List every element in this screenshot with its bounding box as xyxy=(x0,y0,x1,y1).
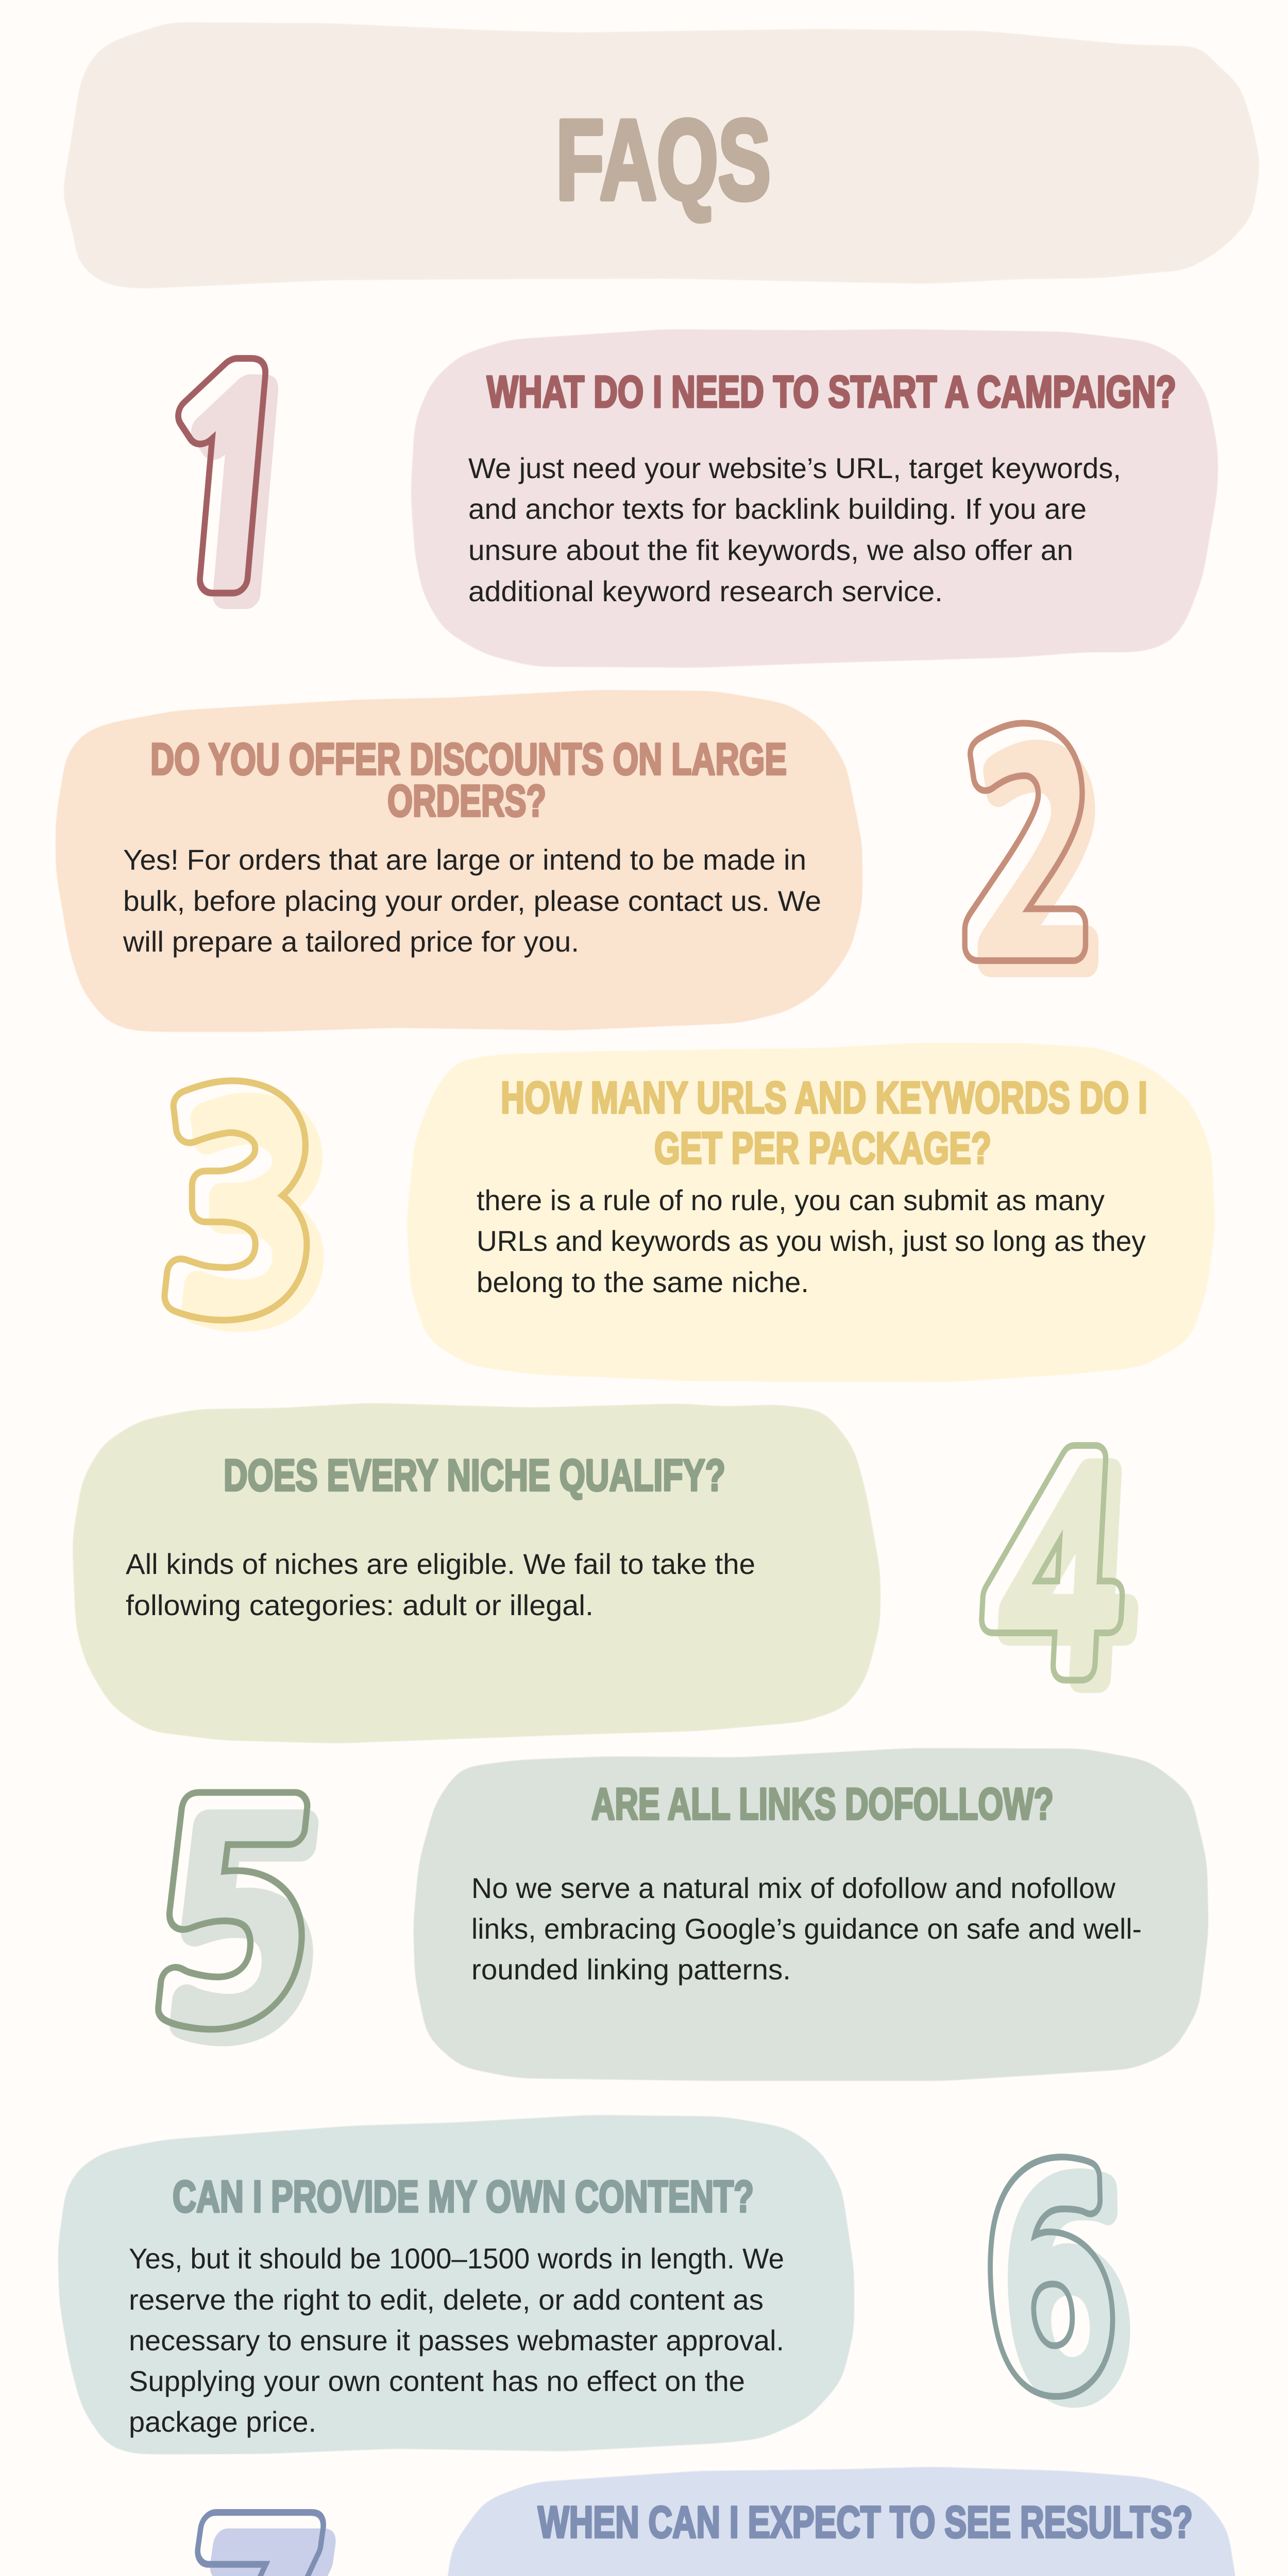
text: answer 2: will prepare a tailored price for you. xyxy=(123,925,579,958)
text: answer 4: following categories: adult or illegal. xyxy=(126,1589,594,1621)
panel: question 6 xyxy=(58,2115,854,2454)
icon: number 2: 2 xyxy=(974,731,1109,1006)
panel: title banner xyxy=(62,22,1261,289)
text: answer 6: reserve the right to edit, delete, or add content as xyxy=(129,2283,764,2316)
text: answer 4: All kinds of niches are eligible. We fail to take the xyxy=(126,1548,755,1580)
icon: number 3: 3 xyxy=(160,1071,317,1347)
icon: number 3: 3 xyxy=(177,1083,334,1359)
icon: number 5: 5 xyxy=(150,1798,336,2074)
icon: number 6: 6 xyxy=(979,2148,1120,2424)
panel: question 7 xyxy=(444,2467,1240,2576)
text: answer 3: belong to the same niche. xyxy=(477,1266,809,1298)
heading: question 2: ORDERS? xyxy=(387,776,546,826)
text: answer 5: links, embracing Google’s guidance on safe and well- xyxy=(471,1912,1142,1945)
icon: number 5: 5 xyxy=(139,1781,325,2057)
panel: question 3 xyxy=(406,1043,1215,1382)
icon: number 1 xyxy=(175,355,278,609)
text: answer 5: No we serve a natural mix of dofollow and nofollow xyxy=(471,1872,1116,1904)
text: answer 2: bulk, before placing your order, please contact us. We xyxy=(123,885,821,917)
icon: number 6: 6 xyxy=(997,2160,1138,2435)
text: answer 2: Yes! For orders that are large or intend to be made in xyxy=(123,843,806,876)
title: FAQS xyxy=(556,96,771,223)
text: answer 3: there is a rule of no rule, you can submit as many xyxy=(477,1184,1105,1216)
text: answer 6: package price. xyxy=(129,2405,316,2438)
text: answer 5: rounded linking patterns. xyxy=(471,1953,791,1986)
panel: question 5 xyxy=(413,1748,1209,2081)
heading: question 2: DO YOU OFFER DISCOUNTS ON LARGE xyxy=(150,735,787,784)
text: answer 1 xyxy=(468,452,1121,607)
text: answer 6: Yes, but it should be 1000–1500 words in length. We xyxy=(129,2242,784,2275)
icon: number 2: 2 xyxy=(961,714,1096,990)
icon: number 1: 1 xyxy=(151,363,327,638)
icon: number 4: 4 xyxy=(980,1433,1128,1709)
text: answer 1: and anchor texts for backlink building. If you are xyxy=(468,493,1087,525)
heading: question 6: CAN I PROVIDE MY OWN CONTENT? xyxy=(173,2172,754,2222)
text: answer 3 xyxy=(477,1184,1146,1298)
text: answer 6: Supplying your own content has no effect on the xyxy=(129,2365,745,2397)
panel: question 2 xyxy=(56,690,862,1032)
panel: question 1 xyxy=(411,329,1218,668)
text: answer 4 xyxy=(126,1548,755,1621)
text: answer 5 xyxy=(471,1872,1142,1986)
text: answer 6: necessary to ensure it passes webmaster approval. xyxy=(129,2324,784,2357)
icon: number 1: 1 xyxy=(139,347,314,622)
text: answer 6 xyxy=(129,2242,784,2438)
heading: question 3 xyxy=(501,1073,1147,1173)
text: answer 1: additional keyword research service. xyxy=(468,575,943,607)
heading: question 3: GET PER PACKAGE? xyxy=(654,1124,991,1173)
text: answer 2 xyxy=(123,843,821,958)
panel: question 4 xyxy=(72,1403,880,1743)
heading: question 5: ARE ALL LINKS DOFOLLOW? xyxy=(591,1780,1054,1829)
icon: number 4: 4 xyxy=(996,1446,1144,1722)
text: answer 1: We just need your website’s URL, target keywords, xyxy=(468,452,1121,484)
text: answer 3: URLs and keywords as you wish, just so long as they xyxy=(477,1225,1146,1257)
text: answer 1: unsure about the fit keywords, we also offer an xyxy=(468,534,1073,566)
heading: question 2 xyxy=(150,735,787,826)
heading: question 4: DOES EVERY NICHE QUALIFY? xyxy=(224,1451,725,1500)
